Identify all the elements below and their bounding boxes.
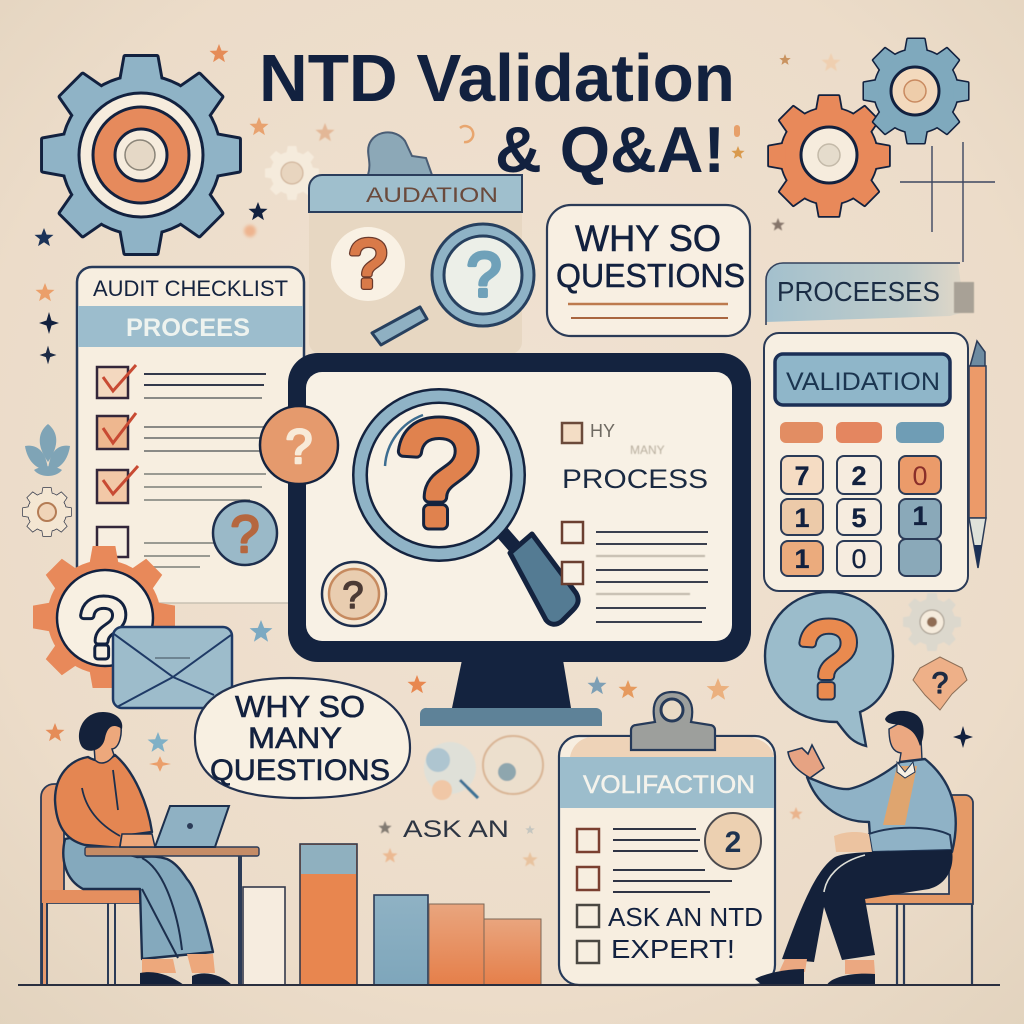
trousers [782, 850, 953, 962]
trousers [63, 838, 213, 959]
icon: orange gear top right [769, 96, 889, 216]
icon: blue gear top right [864, 39, 968, 143]
shirt and tie [883, 762, 917, 825]
band: process [78, 306, 303, 347]
torso [55, 755, 152, 848]
panel: computer monitor [288, 353, 751, 726]
icon: screen magnifier: ? [397, 392, 479, 555]
panel: why so questions callout [547, 205, 750, 336]
legs and shoes [140, 954, 232, 985]
icon: orange question badge: ? [286, 421, 312, 474]
screen checklist: MANY [630, 443, 665, 457]
shoes [755, 959, 875, 985]
head [889, 720, 922, 769]
chair [41, 784, 144, 985]
band label: PROCEES [126, 314, 250, 342]
number keys: 2 [851, 461, 867, 491]
icon: screen magnifier: ? [397, 392, 479, 555]
number keys: 1 [794, 544, 810, 574]
hand raised [788, 745, 824, 778]
icon: pencil [969, 341, 986, 568]
heading: audit checklist: AUDIT CHECKLIST [93, 276, 288, 301]
checkbox rows [577, 829, 732, 963]
icon: pale background gear [265, 146, 319, 200]
scattered stars and sparkles [34, 44, 973, 866]
monitor base [420, 708, 602, 726]
icon: large blue gear [43, 57, 239, 253]
screen checklist: PROCESS [562, 464, 708, 494]
icon: blue question badge [213, 501, 277, 565]
callout: why so many questions: WHY SO [235, 689, 365, 724]
callout: why so many questions: MANY [248, 722, 342, 755]
figure: man talking [755, 711, 973, 985]
hair [885, 711, 924, 746]
icon: orange question gear: ? [80, 583, 126, 674]
number keys: 0 [851, 544, 867, 574]
hair [79, 712, 122, 751]
clipboard top edge [570, 737, 774, 757]
call to action: ASK AN NTD [608, 902, 763, 932]
header label: VOLIFACTION [583, 771, 755, 799]
call to action [608, 902, 763, 964]
text: ask an: ASK AN [403, 816, 509, 843]
header band [309, 175, 522, 212]
call to action: EXPERT! [611, 934, 735, 964]
icon: pale gear [903, 593, 961, 651]
header label: AUDATION [366, 183, 498, 207]
checklist rows [97, 365, 266, 567]
icon: blue question badge: ? [231, 506, 259, 564]
tag: processes [766, 263, 974, 325]
callout: why so many questions: QUESTIONS [210, 754, 390, 787]
icon: small question badge [322, 562, 386, 626]
icon: blurred magnifier doodle [424, 736, 543, 800]
icon: small cream gear [23, 488, 71, 536]
numbered badge [705, 813, 761, 869]
number keys: 1 [794, 503, 810, 533]
clipboard clip [368, 132, 432, 175]
panel: calculator [764, 333, 968, 591]
panel: why so questions callout: WHY SO [575, 218, 721, 259]
number keys: 0 [912, 461, 928, 491]
number keys [781, 456, 941, 576]
panel: why so questions callout: QUESTIONS [556, 257, 745, 294]
forearm [869, 828, 952, 852]
figure: woman at laptop [41, 712, 259, 985]
title: & Q&A! [495, 113, 725, 186]
icon: screen magnifier [360, 392, 578, 624]
callout: why so many questions [195, 678, 410, 798]
hand resting [834, 832, 872, 852]
decorative crosshair lines [900, 142, 995, 262]
torso and arm [807, 759, 956, 852]
icon: orange question gear [33, 546, 175, 688]
icon: question circle [331, 226, 405, 302]
title: NTD Validation [259, 41, 735, 116]
icon: question circle: ? [349, 226, 387, 302]
calculator display [775, 354, 950, 405]
desk [85, 847, 259, 985]
icon: orange question gear: ? [80, 583, 126, 674]
icon: blue leaf [25, 424, 70, 476]
bar chart [243, 844, 541, 985]
icon: envelope [113, 627, 232, 708]
monitor stand [452, 660, 571, 708]
tag: processes: PROCEESES [777, 276, 940, 307]
chair [864, 795, 973, 985]
icon: magnifier: ? [467, 241, 501, 310]
icon: orange question badge [260, 406, 338, 484]
clipboard clip [631, 692, 715, 750]
calculator display: VALIDATION [786, 368, 940, 396]
laptop [155, 806, 229, 847]
icon: orange question blob [913, 657, 967, 710]
number keys: 1 [912, 501, 928, 531]
icon: question circle: ? [349, 226, 387, 302]
header band [560, 757, 774, 808]
icon: magnifier [372, 224, 534, 345]
hand [120, 834, 155, 847]
speech bubble: question [765, 592, 893, 746]
title [259, 41, 735, 186]
trouser highlight [824, 855, 865, 892]
icon: orange question blob: ? [932, 667, 948, 700]
number keys: 5 [851, 503, 867, 533]
panel: audation clipboard [309, 132, 534, 354]
ground line [18, 984, 1000, 986]
function keys [780, 422, 944, 443]
neck and face [94, 722, 121, 763]
icon: small question badge: ? [342, 575, 364, 617]
panel: audit checklist [77, 267, 304, 603]
speech bubble: question: ? [799, 601, 857, 719]
trouser crease [142, 858, 182, 958]
number keys: 7 [794, 461, 810, 491]
screen checklist [562, 421, 708, 622]
panel: verification clipboard [559, 692, 775, 985]
sleeve crease [82, 770, 120, 836]
numbered badge: 2 [725, 826, 741, 859]
speech bubble: question: ? [799, 601, 857, 719]
screen checklist: HY [590, 421, 615, 441]
monitor screen [306, 372, 732, 641]
